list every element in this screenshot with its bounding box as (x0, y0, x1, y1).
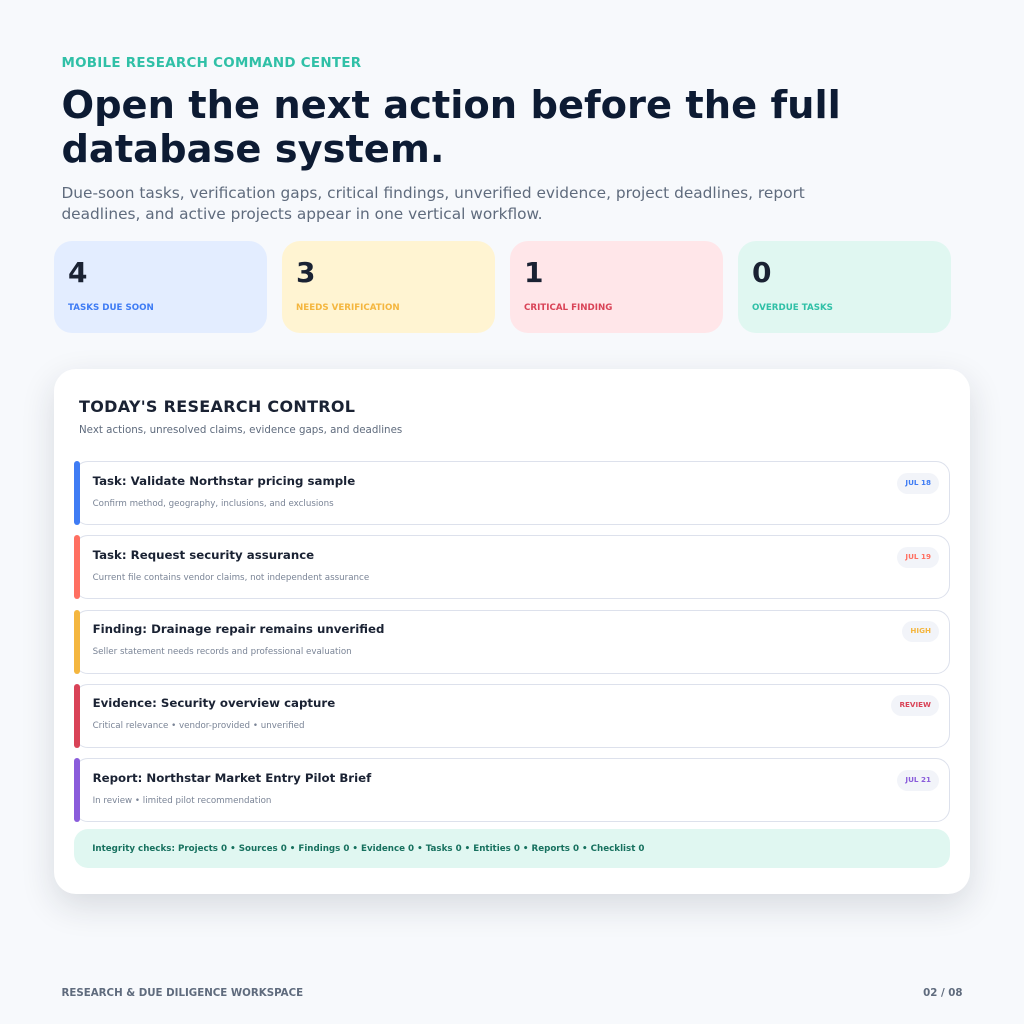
row: market entry pilot brief (74, 758, 950, 822)
panel subheading: Next actions, unresolved claims, evidence gaps, and deadlines (79, 424, 402, 436)
title: database system. (61, 127, 444, 172)
stat card: needs verification (282, 241, 494, 333)
stat card: tasks due soon: 4 (68, 256, 87, 289)
title (61, 83, 841, 172)
row: drainage repair finding: Finding: Drainage repair remains unverified (93, 622, 384, 636)
stat card: tasks due soon: TASKS DUE SOON (68, 303, 154, 313)
stat card: needs verification: 3 (296, 256, 315, 289)
row: validate pricing sample: JUL 18 (905, 478, 931, 486)
row: market entry pilot brief: JUL 21 (905, 774, 931, 784)
subtitle: deadlines, and active projects appear in one vertical workflow. (61, 205, 543, 223)
stat card: critical finding: CRITICAL FINDING (524, 303, 612, 313)
row: drainage repair finding: Seller statement needs records and professional evaluation (93, 647, 352, 657)
row: market entry pilot brief: Report: Northstar Market Entry Pilot Brief (93, 771, 371, 785)
row: validate pricing sample: Task: Validate Northstar pricing sample (93, 474, 355, 488)
stat card: needs verification: NEEDS VERIFICATION (296, 303, 400, 313)
footer right: 02 / 08 (923, 987, 963, 999)
stat card: critical finding (510, 241, 722, 333)
row: security overview evidence: Critical relevance • vendor-provided • unverified (93, 721, 305, 731)
integrity checks banner (74, 829, 950, 868)
stat card: critical finding: 1 (524, 256, 543, 289)
title: Open the next action before the full (61, 83, 841, 128)
row: request security assurance: Current file contains vendor claims, not independent assurance (93, 573, 369, 583)
footer left: RESEARCH & DUE DILIGENCE WORKSPACE (61, 987, 303, 999)
row: security overview evidence: Evidence: Security overview capture (93, 696, 335, 710)
row: request security assurance: Task: Request security assurance (93, 548, 314, 562)
stat card: overdue tasks: OVERDUE TASKS (752, 303, 833, 313)
row: drainage repair finding: HIGH (910, 626, 931, 635)
kicker: MOBILE RESEARCH COMMAND CENTER (61, 56, 361, 71)
stat card: overdue tasks (738, 241, 950, 333)
row: request security assurance (74, 535, 950, 599)
row: request security assurance: JUL 19 (905, 552, 931, 561)
stat card: overdue tasks: 0 (752, 256, 771, 289)
stat card: tasks due soon (54, 241, 267, 333)
row: market entry pilot brief: In review • limited pilot recommendation (93, 796, 271, 806)
row: validate pricing sample: Confirm method, geography, inclusions, and exclusions (93, 498, 334, 508)
integrity checks banner: Integrity checks: Projects 0 • Sources 0 • Findings 0 • Evidence 0 • Tasks 0 • Entities 0 • Reports 0 • Checklist 0 (92, 844, 644, 854)
panel heading: TODAY'S RESEARCH CONTROL (79, 397, 355, 416)
row: validate pricing sample (74, 461, 950, 525)
row: security overview evidence: REVIEW (899, 700, 931, 709)
subtitle (61, 184, 805, 223)
row: drainage repair finding (74, 610, 950, 674)
panel: today's research control (54, 369, 970, 894)
row: security overview evidence (74, 684, 950, 748)
subtitle: Due-soon tasks, verification gaps, critical findings, unverified evidence, project deadlines, report (61, 184, 805, 202)
